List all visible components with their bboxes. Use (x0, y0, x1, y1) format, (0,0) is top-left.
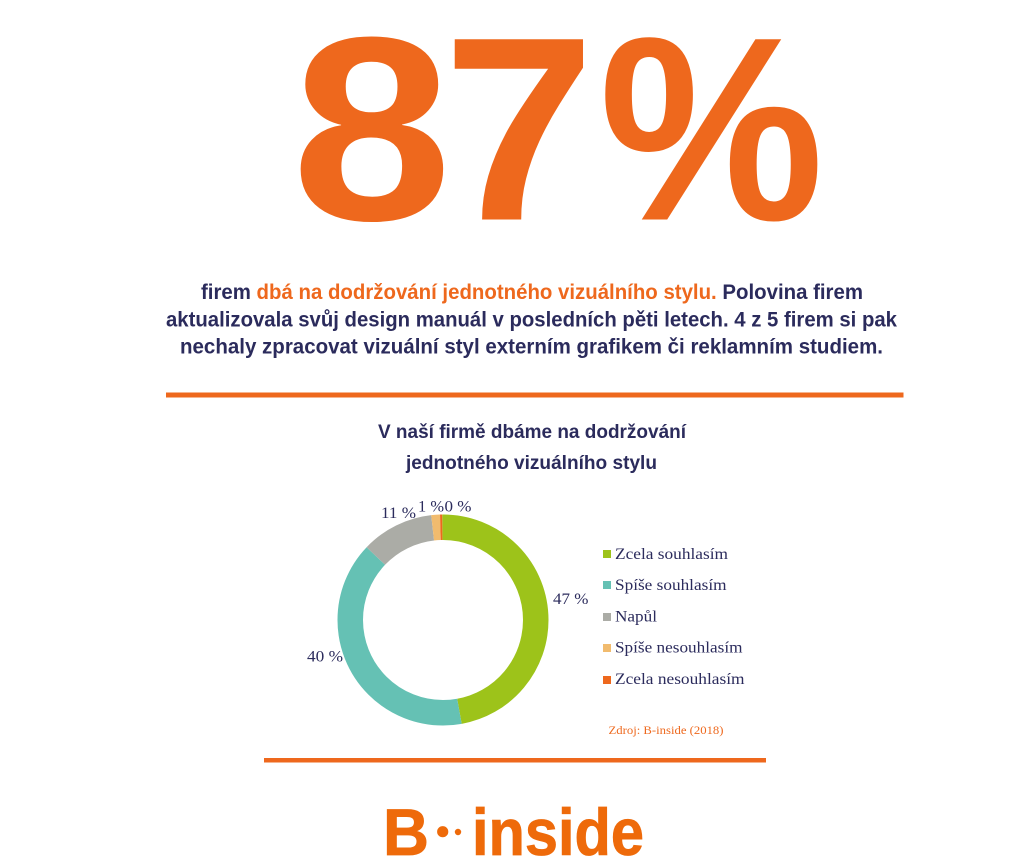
chart heading (378, 421, 687, 474)
legend: Zcela souhlasím (615, 546, 729, 563)
intro text block: aktualizovala svůj design manuál v posledních pěti letech. 4 z 5 firem si pak (166, 308, 897, 332)
donut value labels: 1 % (418, 498, 444, 516)
donut value labels: 11 % (381, 505, 416, 522)
donut value labels: 40 % (307, 648, 343, 666)
legend (603, 546, 745, 688)
chart heading: jednotného vizuálního stylu (405, 452, 657, 474)
donut value labels (307, 498, 588, 666)
donut chart (350, 527, 536, 713)
intro text block (166, 281, 897, 358)
source note: Zdroj: B-inside (2018) (608, 723, 724, 737)
legend: Spíše nesouhlasím (615, 640, 743, 656)
chart heading: V naší firmě dbáme na dodržování (378, 421, 687, 443)
intro text block: nechaly zpracovat vizuální styl externím grafikem či reklamním studiem. (180, 336, 883, 358)
logo: B-inside (383, 795, 644, 859)
legend: Zcela nesouhlasím (615, 671, 745, 688)
donut value labels: 0 % (444, 498, 472, 516)
donut value labels: 47 % (553, 591, 588, 608)
legend: Napůl (615, 608, 658, 626)
legend: Spíše souhlasím (615, 577, 727, 594)
intro text block: firem dbá na dodržování jednotného vizuálního stylu. Polovina firem (201, 281, 863, 304)
